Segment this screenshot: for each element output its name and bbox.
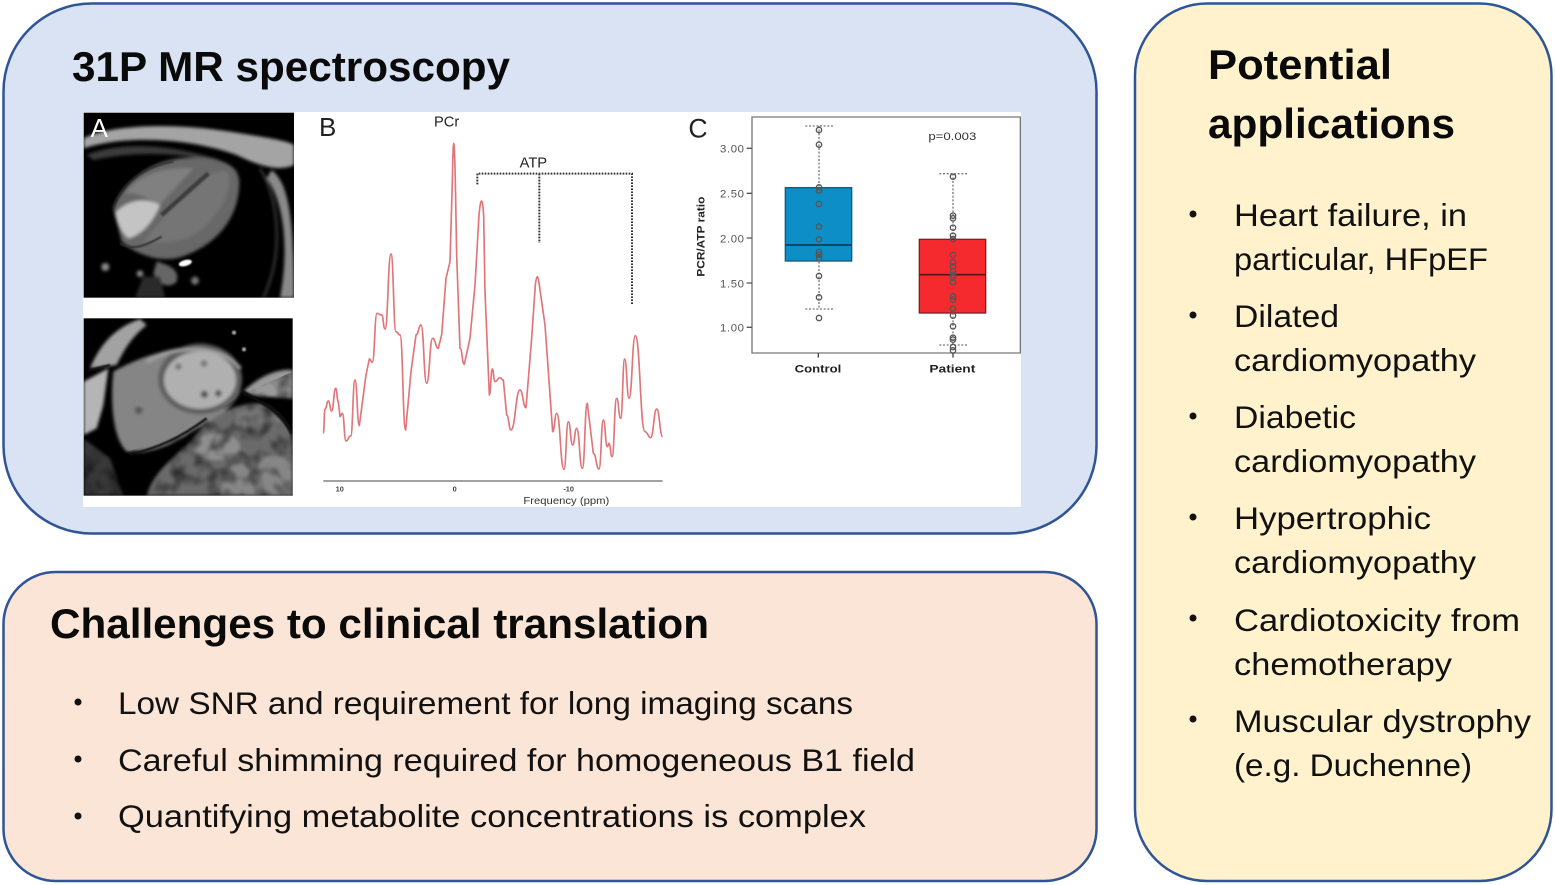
bullet list: applications: cardiomyopathy [1234, 544, 1476, 580]
y axis ticks and labels: 1.50 [720, 278, 744, 290]
bullet list: challenges: Quantifying metabolite concentrations is complex [118, 798, 866, 834]
chart: PCr/ATP box plot [688, 113, 1020, 375]
ATP label with bracket: ATP [520, 156, 547, 172]
axis: Frequency (ppm) [523, 496, 609, 507]
image: short-axis cardiac MR [84, 318, 293, 496]
axis [323, 481, 663, 507]
figure background [83, 112, 1021, 507]
bullet list: challenges [74, 685, 915, 834]
plot frame [752, 117, 1020, 353]
bullet list: applications: particular, HFpEF [1234, 241, 1488, 277]
bullet list: applications: Muscular dystrophy [1234, 703, 1531, 739]
bullet list: applications: Hypertrophic [1234, 500, 1431, 536]
bullet list: applications: Dilated [1234, 298, 1339, 334]
x axis labels: Patient [929, 363, 976, 375]
heading: 31P MR spectroscopy: 31P MR spectroscopy [72, 43, 511, 90]
spectrum line [323, 143, 663, 469]
panel: 31P MR spectroscopy [4, 4, 1096, 534]
PCr label: PCr [434, 114, 459, 130]
axis: -10 [563, 485, 574, 494]
patient box [919, 174, 986, 353]
heading: potential applications: Potential [1208, 41, 1392, 88]
bullet list: applications: Cardiotoxicity from [1234, 602, 1520, 638]
bullet list: applications: (e.g. Duchenne) [1234, 747, 1472, 783]
bullet list: applications: Heart failure, in [1234, 197, 1467, 233]
bullet list: challenges: Low SNR and requirement for long imaging scans [118, 685, 853, 721]
y axis ticks and labels: 3.00 [720, 144, 744, 156]
panel: challenges to clinical translation [4, 572, 1096, 881]
heading: potential applications: applications [1208, 100, 1455, 147]
label A: A [91, 113, 109, 143]
y axis ticks and labels: 1.00 [720, 323, 744, 335]
ATP label with bracket [477, 156, 632, 305]
y axis ticks and labels: 2.50 [720, 189, 744, 201]
bullet list: applications [1190, 197, 1531, 783]
axis: 10 [336, 485, 344, 494]
control box [785, 126, 852, 321]
bullet list: applications: Diabetic [1234, 399, 1356, 435]
chart: 31P spectrum [319, 112, 663, 507]
bullet list: applications: cardiomyopathy [1234, 342, 1476, 378]
x axis labels: Control [795, 363, 841, 375]
bullet list: challenges: Careful shimming required for homogeneous B1 field [118, 742, 915, 778]
heading: potential applications [1208, 41, 1455, 147]
panel: potential applications [1135, 4, 1552, 881]
y axis ticks and labels [720, 144, 752, 335]
bullet list: applications: chemotherapy [1234, 646, 1452, 682]
x axis labels [795, 353, 976, 375]
axis: 0 [453, 485, 457, 494]
image: four-chamber cardiac MR [84, 113, 294, 298]
label B: B [319, 112, 336, 142]
y axis title: PCR/ATP ratio [695, 196, 707, 277]
label C: C [688, 113, 708, 143]
heading: challenges: Challenges to clinical translation [50, 600, 709, 647]
p-value: p=0.003 [928, 131, 976, 143]
y axis ticks and labels: 2.00 [720, 233, 744, 245]
bullet list: applications: cardiomyopathy [1234, 443, 1476, 479]
